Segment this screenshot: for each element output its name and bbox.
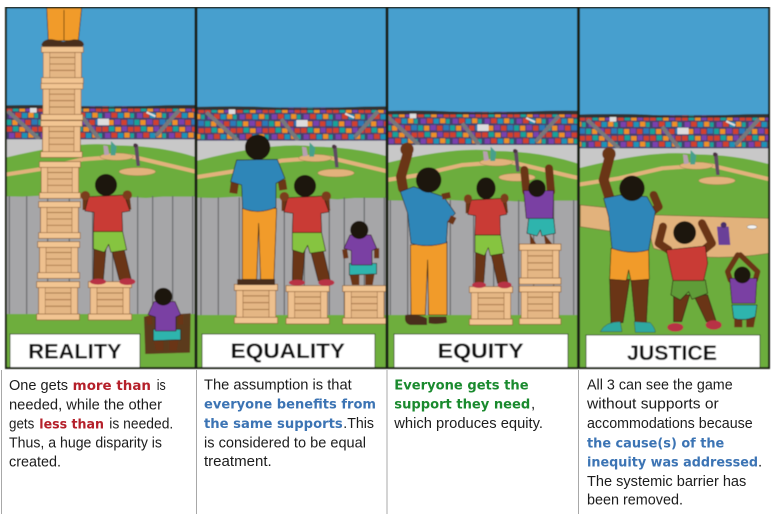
caption: equality: treatment. (204, 453, 272, 470)
caption: reality (9, 377, 173, 471)
panel: equity (366, 7, 607, 378)
caption: reality: needed, while the other (9, 396, 162, 413)
panel frames (6, 8, 769, 368)
caption: equality: is considered to be equal (204, 434, 366, 451)
tall man on crate (231, 135, 285, 323)
short person on crate (343, 221, 386, 324)
green ground (388, 314, 578, 321)
caption: reality: less than (39, 417, 104, 432)
panel: reality (6, 8, 196, 368)
label: justice: JUSTICE (627, 342, 717, 365)
label: reality (10, 334, 140, 368)
medium person on one crate (81, 174, 135, 320)
illustration: four comic panels (0, 7, 777, 382)
panel: justice (566, 7, 777, 382)
caption: equality (204, 376, 376, 470)
caption: reality: created. (9, 454, 61, 471)
caption: justice: All 3 can see the game (587, 376, 733, 393)
caption: justice (586, 376, 762, 509)
sky (580, 7, 769, 116)
tall man without crate (600, 147, 659, 332)
caption: equality: The assumption is that (204, 376, 353, 393)
tall man on ground (400, 143, 455, 325)
green ground (196, 314, 386, 318)
caption: equity: Everyone gets the (394, 378, 529, 393)
caption: equality: .This (343, 415, 374, 432)
caption: reality: more than (73, 379, 151, 394)
stadium and field (579, 114, 769, 368)
sky (388, 7, 578, 112)
caption: justice: without supports or (586, 396, 719, 413)
caption: reality: Thus, a huge disparity is (9, 435, 162, 452)
panel: equality (196, 8, 386, 368)
caption: justice: accommodations because (587, 415, 753, 432)
short person in a hole (144, 288, 191, 354)
label: reality: REALITY (28, 340, 122, 363)
caption: reality: gets (9, 415, 34, 432)
label: equality (202, 334, 375, 368)
wooden fence (196, 196, 386, 316)
short person on two crates (519, 168, 561, 324)
stadium and field (388, 110, 578, 202)
man on tall crate tower (37, 8, 84, 320)
caption: justice: . (758, 454, 762, 471)
medium person on crate (280, 175, 334, 324)
green ground (6, 314, 196, 317)
label: equity: EQUITY (438, 340, 524, 363)
wooden fence (388, 199, 578, 316)
medium person without crate (659, 221, 722, 332)
caption: equality: the same supports (204, 417, 343, 432)
caption: equity (393, 378, 543, 432)
caption: justice: The systemic barrier has (587, 473, 746, 490)
wooden fence (6, 195, 196, 315)
stadium and field (6, 104, 196, 199)
caption: reality: is needed. (109, 415, 173, 432)
medium person on crate (464, 177, 513, 325)
caption: justice: the cause(s) of the (587, 436, 724, 451)
label: justice (586, 335, 760, 368)
caption: equity: , (531, 396, 535, 413)
caption: justice: inequity was addressed (587, 456, 758, 471)
caption: reality: is (157, 377, 166, 394)
caption table grid (2, 370, 578, 514)
caption: justice: been removed. (587, 492, 683, 509)
sky (6, 7, 195, 107)
caption: equity: support they need (394, 398, 530, 413)
label: equity (394, 334, 568, 368)
short person without crate (728, 255, 758, 327)
infield dirt (580, 205, 769, 257)
caption: reality: One gets (9, 377, 68, 394)
stadium and field (196, 106, 386, 200)
sky (197, 7, 387, 108)
label: equality: EQUALITY (231, 340, 345, 363)
caption: equality: everyone benefits from (204, 398, 376, 413)
caption: equity: which produces equity. (393, 415, 543, 432)
